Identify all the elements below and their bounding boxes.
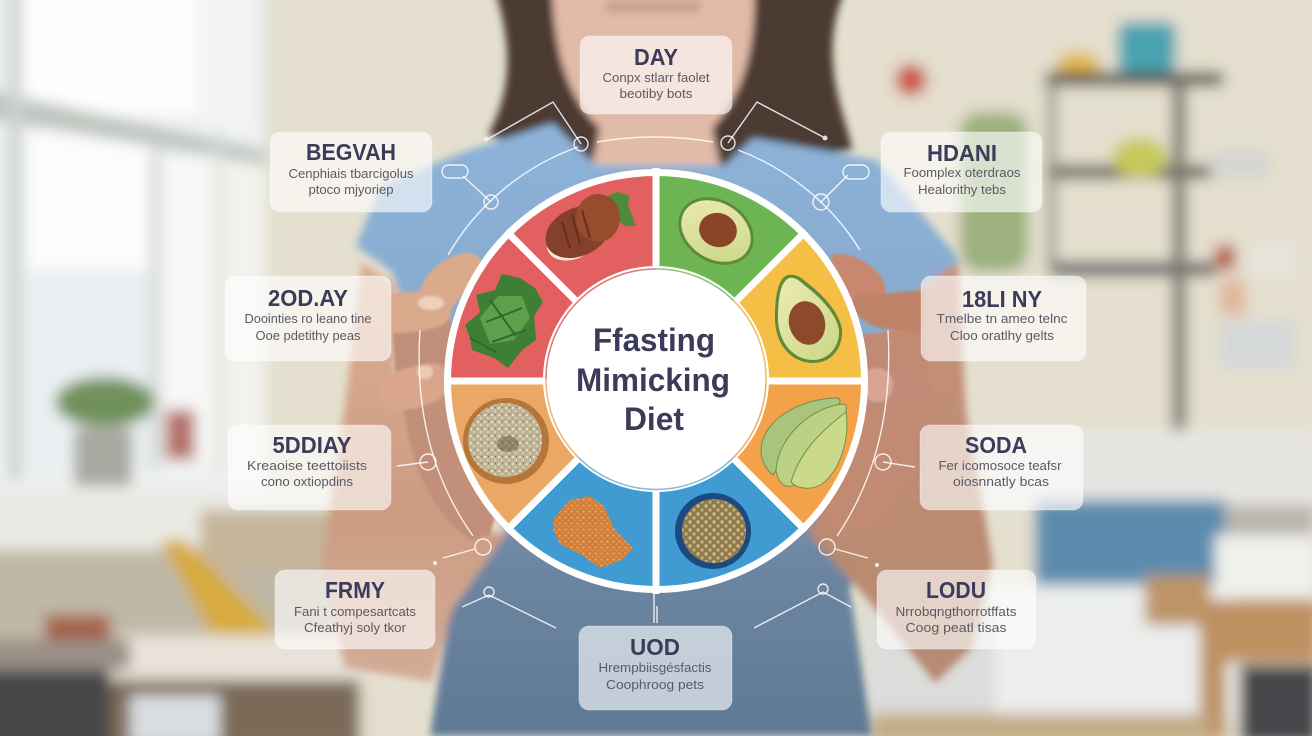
card: UOD: UOD [630,634,680,660]
card: LODU: Coog peatl tisas [906,620,1007,635]
hands [379,253,932,540]
card: SODA [920,425,1083,510]
right index finger [853,290,925,332]
card: SODA: SODA [965,432,1027,458]
mouth [605,0,701,13]
card: LODU: Nrrobqngthorrotffats [896,604,1017,619]
card: 2OD.AY: Ooe pdetithy peas [256,328,361,343]
right room shelves [895,22,1295,440]
card: 5DDIAY: 5DDIAY [272,432,352,458]
card: DAY [580,36,732,114]
wedge: orange right [656,381,861,526]
bottom connectors [462,584,851,628]
top-right connector [721,102,869,250]
food: avocado half on green [666,184,766,278]
food: avocado half on yellow [775,275,842,363]
card: BEGVAH: ptoco mjyoriep [308,182,394,197]
centre ring [546,269,766,489]
card: 2OD.AY: 2OD.AY [268,285,348,311]
card: FRMY: Fani t compesartcats [294,604,417,619]
card: BEGVAH: BEGVAH [306,139,396,165]
wedge: blue bottom-left [511,381,656,586]
wedge: blue bottom-right [656,381,801,586]
shirt [356,123,960,736]
card: BEGVAH [270,132,432,212]
title: Mimicking [576,362,730,398]
card: UOD: Hrempbiisgésfactis [598,660,712,675]
connector lines [397,102,915,628]
card: DAY: DAY [634,44,678,70]
card: BEGVAH: Cenphiais tbarcigolus [288,166,414,181]
food: avocado slices [761,398,847,488]
card: 2OD.AY [225,276,391,361]
food: grain bowl [463,398,549,484]
wedge: tan left [451,381,656,526]
top arc [597,137,713,142]
right palm [815,330,932,538]
wedge dividers [444,168,868,594]
left middle nail [417,365,433,379]
right middle finger [868,370,928,405]
left arm [322,262,507,682]
title: Diet [624,401,684,437]
card: 18LI NY: Tmelbe tn ameo telnc [936,311,1068,326]
title [576,322,730,437]
left palm [392,320,500,540]
left middle finger [379,363,448,410]
card: LODU [877,570,1036,649]
card: SODA: Fer icomosoce teafsr [938,458,1062,473]
left index nail [418,296,444,310]
blurred person [322,0,993,736]
card: HDANI: Foomplex oterdraos [904,165,1021,180]
card: FRMY: Cfeathyj soly tkor [304,620,407,635]
wedge: green top-right [656,176,801,381]
card: 5DDIAY [228,425,391,510]
left connector [397,330,491,565]
card: HDANI: Healorithy tebs [918,182,1006,197]
window [0,0,265,510]
card: 18LI NY: 18LI NY [962,286,1042,312]
right arm [808,262,993,683]
title: Ffasting [593,322,715,358]
wedge: red left [451,236,656,381]
face and neck [552,0,754,175]
food: orange lentils [553,496,633,568]
card: 5DDIAY: cono oxtiopdins [261,474,354,489]
food: leafy greens [465,274,543,368]
wheel plate [444,169,868,593]
card: 18LI NY: Cloo oratlhy gelts [950,328,1055,343]
hair [488,0,852,170]
right connector [819,330,915,567]
centre circle [543,266,769,492]
card: FRMY [275,570,435,649]
card: UOD: Coophroog pets [606,677,705,692]
card: DAY: beotiby bots [620,86,693,101]
wedge: yellow right [656,236,861,381]
card: 5DDIAY: Kreaoise teettoiists [247,458,368,473]
right middle tip [861,368,893,402]
window sill and counter [0,490,440,736]
right room sofa [865,430,1312,736]
card: UOD [579,626,732,710]
card: SODA: oiosnnatly bcas [953,474,1050,489]
left thumb [420,253,482,310]
food: dark blue grain bowl [675,493,751,569]
top-left connector [442,102,588,255]
card: DAY: Conpx stlarr faolet [602,70,710,85]
card: LODU: LODU [926,577,986,603]
right thumb [830,254,885,320]
food wheel [444,168,868,594]
wedge: red top-left [511,176,656,381]
card: 2OD.AY: Doointies ro leano tine [244,311,372,326]
card: HDANI [881,132,1042,212]
food: cured meat [537,192,636,268]
potted plants [55,377,195,486]
card: 18LI NY [921,276,1086,361]
card: HDANI: HDANI [927,140,997,166]
card: FRMY: FRMY [325,577,385,603]
left index finger [391,290,452,333]
